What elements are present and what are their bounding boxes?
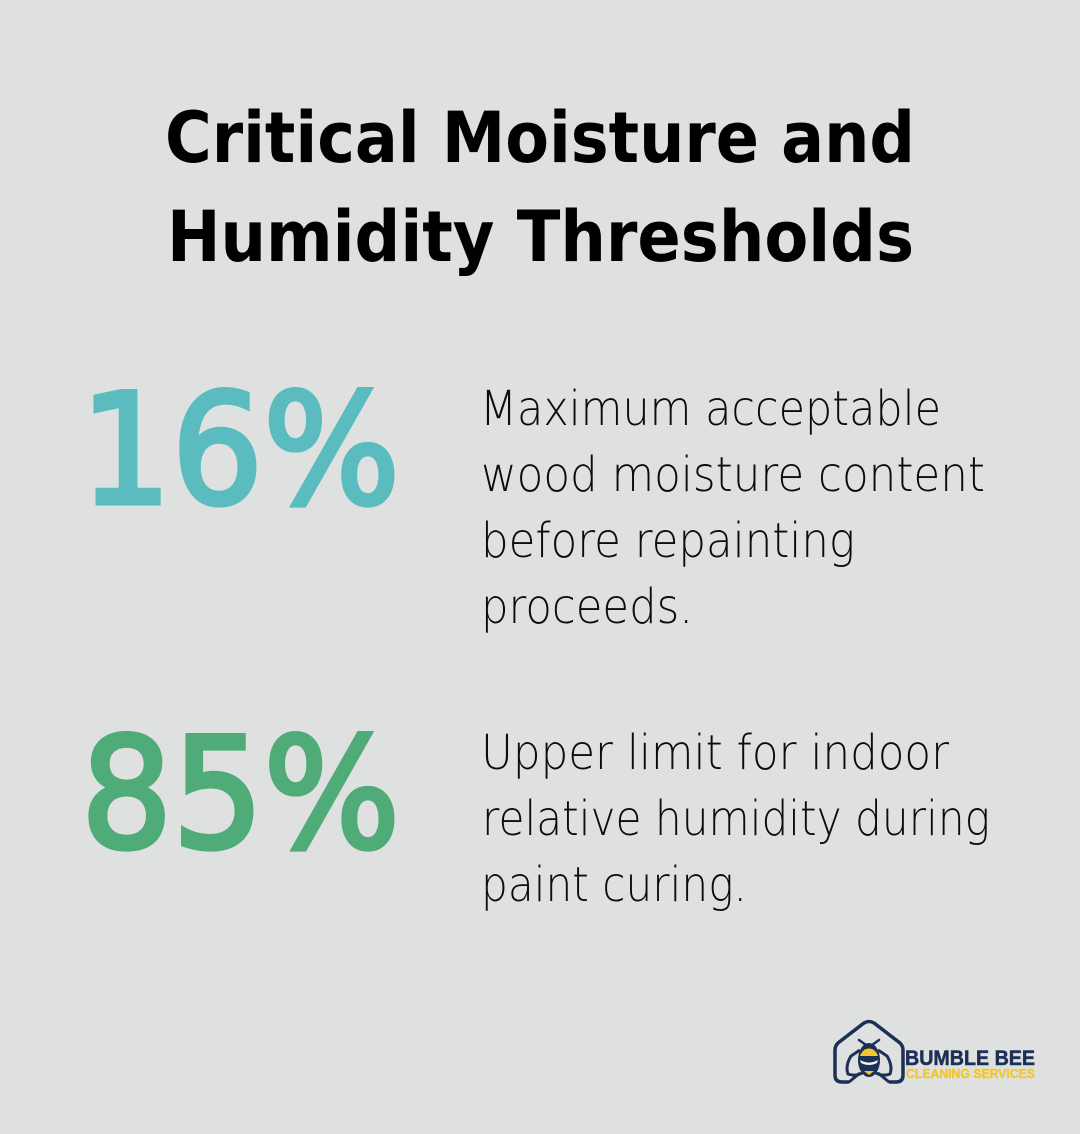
text block: indoor humidity description: relative humidity during (482, 791, 990, 847)
text block: wood moisture description: Maximum acceptable (480, 381, 941, 437)
icon: house and bee (835, 1022, 903, 1082)
logo: Bumble Bee Cleaning Services (835, 1022, 1035, 1082)
logo wordmark: BUMBLE BEE (905, 1047, 1035, 1070)
text block: wood moisture description: proceeds. (481, 579, 693, 635)
logo tagline: CLEANING SERVICES (906, 1066, 1035, 1081)
text block: indoor humidity description: Upper limit for indoor (481, 725, 949, 781)
text block: wood moisture description: wood moisture content (481, 447, 985, 503)
stat: 16%: 16% (80, 362, 400, 540)
title: Humidity Thresholds (167, 196, 914, 278)
title (165, 97, 915, 278)
text block: indoor humidity description: paint curing. (481, 857, 747, 913)
title: Critical Moisture and (165, 97, 915, 179)
text block: indoor humidity description (481, 725, 990, 913)
text block: wood moisture description (480, 381, 985, 635)
stat: 85%: 85% (81, 706, 400, 884)
text block: wood moisture description: before repainting (481, 513, 855, 569)
